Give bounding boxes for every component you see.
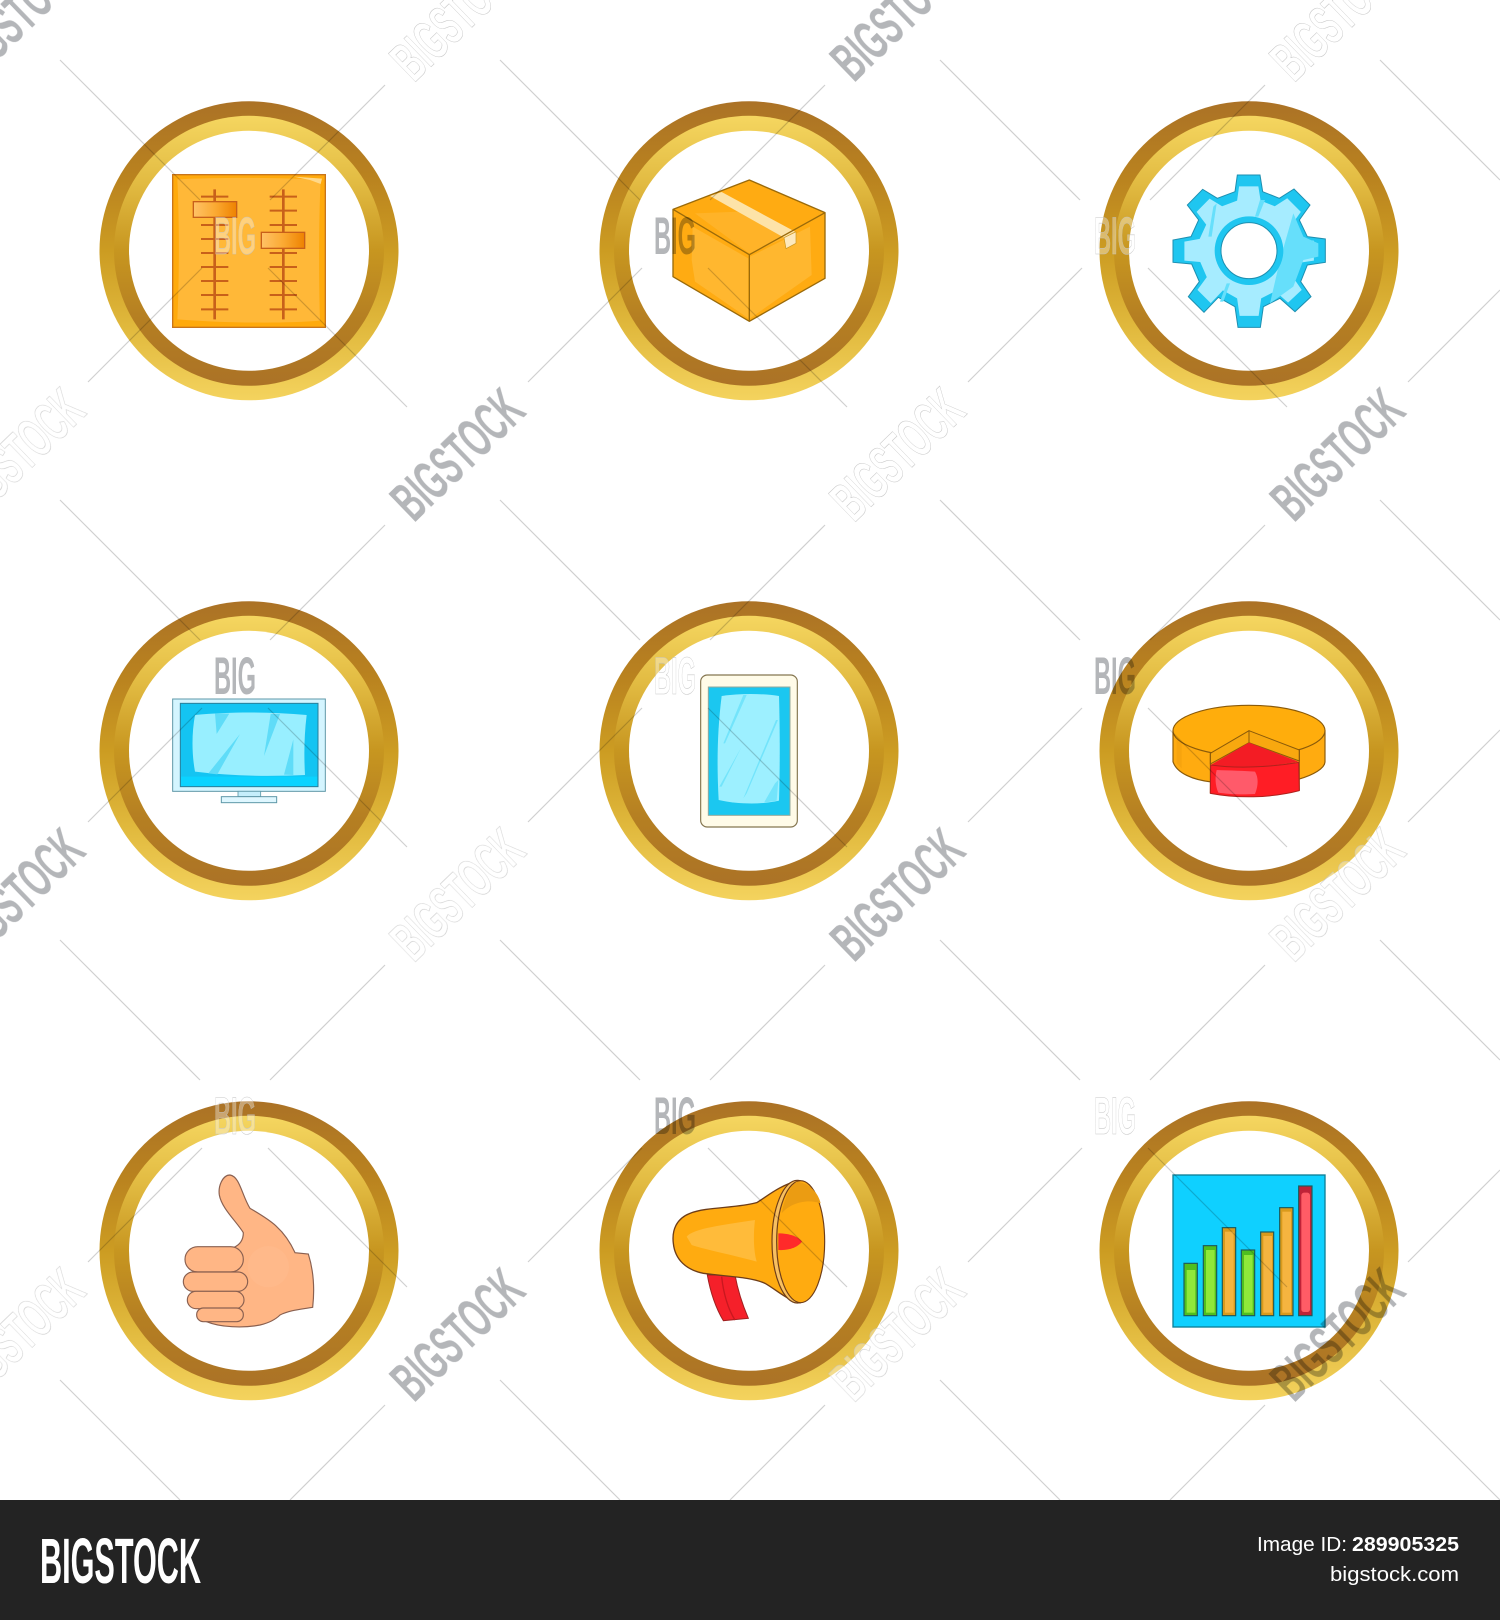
icon badge: thumbs up (100, 1101, 398, 1400)
icon badge: cardboard box (600, 101, 898, 400)
icon badge: equalizer sliders (100, 101, 398, 400)
watermark: diagonal BIGSTOCK labels: BIGSTOCK (379, 817, 537, 973)
watermark: BIG labels: BIG (214, 647, 256, 706)
watermark: BIG labels (214, 207, 1136, 1146)
icon badge: bar chart (1100, 1101, 1398, 1400)
watermark: BIG labels: BIG (654, 647, 696, 706)
image id number: 289905325 (1352, 1534, 1459, 1556)
watermark: BIG labels: BIG (654, 1087, 696, 1146)
image id label: Image ID: (1257, 1534, 1347, 1556)
text: BIG (1094, 207, 1136, 266)
watermark: BIG labels: BIG (654, 207, 696, 266)
text: BIG (1094, 1087, 1136, 1146)
icon badge: pie chart (1100, 601, 1398, 900)
watermark: BIG labels: BIG (214, 207, 256, 266)
watermark: BIG labels: BIG (214, 1087, 256, 1146)
icon badge: monitor (100, 601, 398, 900)
watermark: diagonal BIGSTOCK labels: BIGSTOCK (819, 1257, 977, 1413)
site address: bigstock.com (1330, 1564, 1459, 1586)
footer bar: BIGSTOCK (40, 1525, 201, 1597)
icon badge: gear (1100, 101, 1398, 400)
icon badge: tablet (600, 601, 898, 900)
footer bar (0, 1500, 1500, 1620)
text: BIG (1094, 647, 1136, 706)
watermark: diagonal BIGSTOCK labels: BIGSTOCK (819, 377, 977, 533)
watermark: diagonal BIGSTOCK labels: BIGSTOCK (379, 377, 537, 533)
icon badge: megaphone (600, 1101, 898, 1400)
watermark: diagonal BIGSTOCK labels: BIGSTOCK (819, 817, 977, 973)
watermark: diagonal BIGSTOCK labels: BIGSTOCK (379, 1257, 537, 1413)
